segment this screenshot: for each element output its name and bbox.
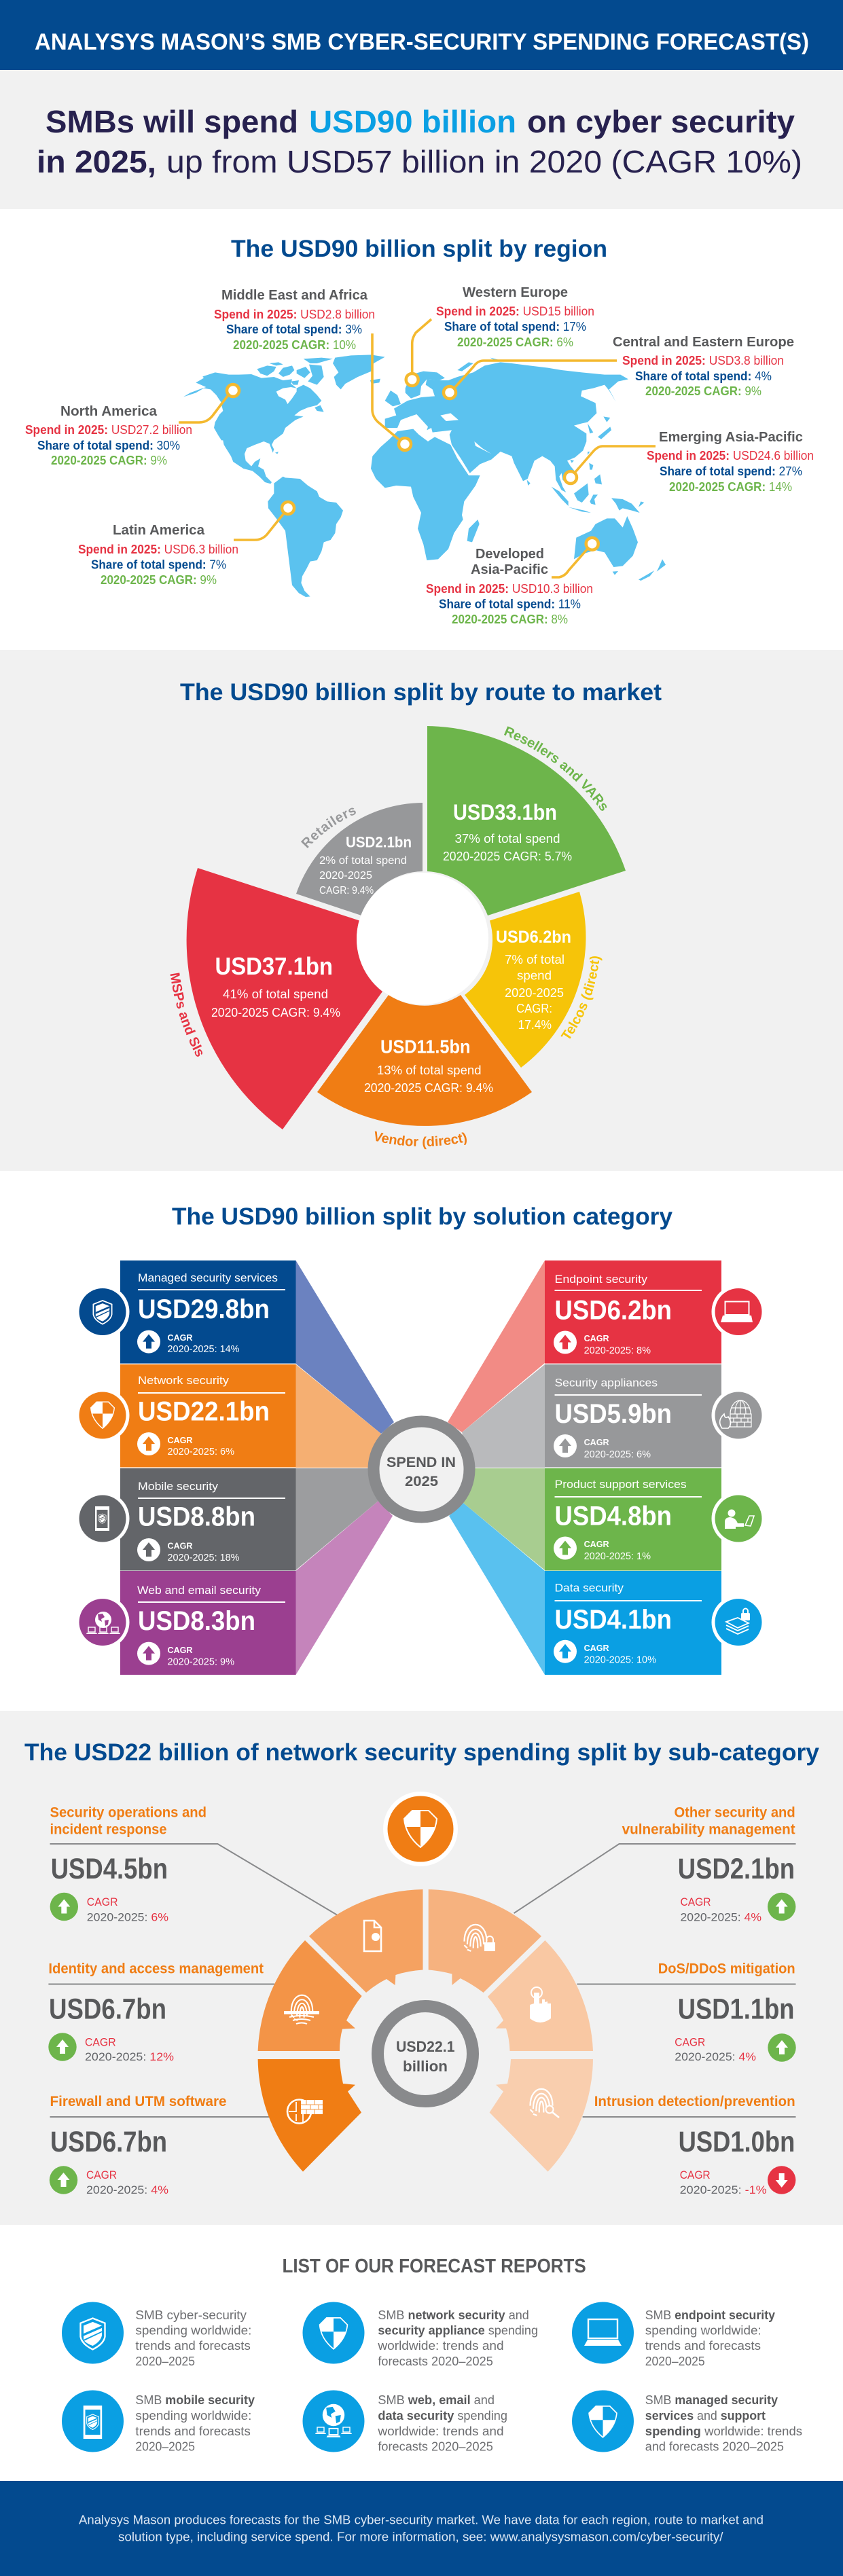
curved labels: Resellers and VARs [504, 726, 607, 811]
report: managed security and support: and forecasts 2020–2025 [645, 2440, 784, 2454]
callout: Developed Asia-Pacific: Developed [476, 547, 544, 562]
headline line 1: SMBs will spend [46, 104, 298, 139]
callout: Developed Asia-Pacific: Share of total spend: 11% [439, 598, 581, 611]
item: firewall and UTM software: 2020-2025: 4% [86, 2183, 168, 2196]
category: mobile security: Mobile security [138, 1480, 219, 1493]
report: cyber-security spending [62, 2302, 251, 2368]
category: endpoint security [545, 1260, 765, 1364]
section title: solution category: The USD90 billion split by solution category [172, 1203, 673, 1230]
category: mobile security: CAGR [167, 1540, 193, 1551]
headline line 2: up from USD57 billion in 2020 (CAGR 10%) [166, 144, 802, 179]
curved labels: MSPs and SIs [170, 973, 202, 1057]
item: other security and vulnerability management [622, 1805, 795, 1923]
report: cyber-security spending: SMB cyber-security [135, 2308, 247, 2322]
banner title: ANALYSYS MASON’S SMB CYBER-SECURITY SPENDING FORECAST(S) [35, 29, 809, 55]
category: data security: USD4.1bn [554, 1605, 672, 1635]
section title: sub-category: The USD22 billion of network security spending split by sub-category [24, 1739, 820, 1766]
wedge: telcos: spend [517, 968, 552, 982]
headline line 1 [46, 104, 795, 139]
report: endpoint security: trends and forecasts [645, 2339, 761, 2353]
wedge: vendor direct: 2020-2025 CAGR: 9.4% [364, 1081, 493, 1095]
callout: North America [25, 384, 239, 467]
callout: Latin America: Latin America [113, 523, 205, 538]
funnel wedges linking categories to centre [296, 1260, 545, 1675]
callout: Emerging Asia-Pacific: 2020-2025 CAGR: 14% [669, 480, 792, 494]
category: product support services: CAGR [584, 1539, 609, 1549]
panel: route to market [0, 650, 843, 1171]
report: network security and appliances: worldwide: trends and [377, 2339, 504, 2353]
callout: Emerging Asia-Pacific: Emerging Asia-Pacific [659, 430, 803, 445]
wedge: resellers and VARs: 37% of total spend [455, 832, 560, 846]
callout: North America: 2020-2025 CAGR: 9% [51, 454, 167, 467]
callout: Central and Eastern Europe: Spend in 2025: USD3.8 billion [622, 354, 784, 367]
segment: firewall and UTM [258, 2059, 361, 2172]
segment: identity and access [258, 1940, 362, 2051]
footer text: solution type, including service spend. For more information, see: www.analysysmason.com/cyber-security/ [118, 2530, 723, 2544]
callout: Middle East and Africa: Share of total spend: 3% [226, 323, 362, 336]
callout: Latin America: 2020-2025 CAGR: 9% [101, 573, 217, 587]
section title: route to market: The USD90 billion split by route to market [180, 679, 662, 706]
centre ring: spend in 2025 [374, 1421, 469, 1517]
callout: Latin America [78, 502, 294, 587]
item: identity and access management [48, 1961, 264, 2063]
callout: Emerging Asia-Pacific: Share of total spend: 27% [660, 465, 802, 478]
centre ring: USD22.1 billion [378, 2006, 473, 2101]
category: endpoint security: 2020-2025: 8% [584, 1345, 651, 1356]
wedge: telcos: 17.4% [518, 1018, 552, 1032]
report: managed security and support: SMB managed security [645, 2393, 778, 2407]
category: managed security services: USD29.8bn [138, 1294, 270, 1324]
wedge: MSPs and SIs [187, 868, 382, 1129]
callout: Western Europe: Western Europe [463, 285, 568, 300]
item: DoS/DDoS mitigation: USD1.1bn [678, 1993, 795, 2026]
callout: North America: Spend in 2025: USD27.2 billion [25, 423, 192, 437]
category: managed security services [76, 1260, 296, 1364]
category: endpoint security: Endpoint security [554, 1273, 648, 1286]
icon: network shield [383, 1792, 458, 1866]
wedge: retailers: 2% of total spend [319, 855, 407, 867]
callout: Developed Asia-Pacific: 2020-2025 CAGR: 8% [452, 613, 568, 626]
callout: Middle East and Africa: 2020-2025 CAGR: 10% [233, 338, 356, 352]
category: endpoint security: CAGR [584, 1333, 609, 1343]
report: mobile security: SMB mobile security [135, 2393, 255, 2407]
category: network security: USD22.1bn [138, 1396, 270, 1426]
item: other security and vulnerability management: USD2.1bn [678, 1853, 795, 1885]
category: data security: Data security [554, 1581, 624, 1595]
category: security appliances: 2020-2025: 6% [584, 1449, 651, 1460]
wedge: resellers and VARs: USD33.1bn [453, 800, 557, 824]
callout: Developed Asia-Pacific [426, 538, 598, 626]
wedge: retailers: 2020-2025 [319, 870, 372, 882]
report: managed security and support [572, 2391, 802, 2454]
footer text: Analysys Mason produces forecasts for the SMB cyber-security market. We have data for each region, route to market and [79, 2514, 764, 2527]
category: data security [545, 1571, 765, 1675]
report: cyber-security spending: trends and forecasts [135, 2339, 251, 2353]
callout: Latin America: Spend in 2025: USD6.3 billion [78, 543, 238, 556]
wedge: vendor direct: 13% of total spend [377, 1064, 481, 1077]
item: other security and vulnerability management: 2020-2025: 4% [681, 1910, 761, 1923]
item: firewall and UTM software: Firewall and UTM software [50, 2094, 227, 2109]
callout: Middle East and Africa: Spend in 2025: USD2.8 billion [214, 308, 375, 321]
callout: Middle East and Africa: Middle East and Africa [221, 288, 368, 303]
callout: Western Europe: 2020-2025 CAGR: 6% [457, 335, 573, 349]
item: DoS/DDoS mitigation: CAGR [675, 2036, 705, 2048]
wedge: telcos: 2020-2025 [505, 986, 564, 1000]
category: security appliances: CAGR [584, 1437, 609, 1447]
category: managed security services: Managed security services [138, 1271, 278, 1284]
centre ring: USD22.1 billion: USD22.1 [396, 2038, 455, 2055]
connector lines [48, 1844, 795, 2117]
wedge: retailers: USD2.1bn [346, 834, 412, 850]
callout: Latin America: Share of total spend: 7% [91, 558, 226, 572]
curved labels: Vendor (direct) [375, 1131, 467, 1149]
item: firewall and UTM software [50, 2094, 227, 2196]
segment: other security [429, 1889, 541, 1993]
callout: Emerging Asia-Pacific [564, 430, 814, 494]
world map [183, 355, 666, 597]
wedge: MSPs and SIs: 41% of total spend [223, 987, 328, 1001]
segment: DoS mitigation [488, 1940, 593, 2051]
callout: Central and Eastern Europe: Share of total spend: 4% [635, 369, 772, 383]
item: intrusion detection/prevention [594, 2094, 795, 2196]
wedge: vendor direct [317, 995, 532, 1126]
category: product support services: USD4.8bn [554, 1502, 672, 1531]
report: managed security and support: spending worldwide: trends [645, 2425, 802, 2438]
callout: Western Europe [406, 285, 594, 386]
item: security operations and incident response: USD4.5bn [51, 1853, 168, 1885]
report: mobile security: spending worldwide: [135, 2409, 251, 2423]
item: DoS/DDoS mitigation [658, 1961, 796, 2063]
wedge: telcos: USD6.2bn [496, 928, 571, 947]
headline line 1: USD90 billion [309, 104, 516, 139]
chart: route to market radial pie [170, 726, 626, 1149]
item: intrusion detection/prevention: Intrusion detection/prevention [594, 2094, 795, 2109]
item: DoS/DDoS mitigation: DoS/DDoS mitigation [658, 1961, 795, 1976]
category: web and email security: 2020-2025: 9% [167, 1657, 234, 1668]
wedge: telcos: CAGR: [516, 1002, 552, 1015]
report: web, email and data security: SMB web, email and [378, 2393, 495, 2407]
heading: list of reports: LIST OF OUR FORECAST REPORTS [283, 2255, 586, 2277]
callout: Developed Asia-Pacific: Spend in 2025: USD10.3 billion [426, 582, 593, 596]
curved labels: Telcos (direct) [560, 956, 602, 1039]
centre ring: spend in 2025: 2025 [405, 1474, 438, 1489]
curved labels: Retailers [301, 808, 356, 848]
wedge: resellers and VARs: 2020-2025 CAGR: 5.7% [443, 850, 572, 863]
report: endpoint security: spending worldwide: [645, 2324, 761, 2338]
category: data security: 2020-2025: 10% [584, 1655, 656, 1666]
callout: Developed Asia-Pacific: Asia-Pacific [471, 562, 548, 577]
centre ring: spend in 2025: SPEND IN [387, 1455, 456, 1470]
callout: Emerging Asia-Pacific: Spend in 2025: USD24.6 billion [647, 449, 814, 462]
item: security operations and incident response: Security operations and [50, 1805, 207, 1821]
centre hole [357, 873, 488, 1004]
category: network security: CAGR [167, 1435, 193, 1445]
category: web and email security: USD8.3bn [138, 1606, 255, 1636]
wedge: retailers: CAGR: 9.4% [319, 885, 374, 896]
wedge: MSPs and SIs: 2020-2025 CAGR: 9.4% [211, 1006, 340, 1019]
curved labels [170, 726, 607, 1149]
report: cyber-security spending: 2020–2025 [135, 2355, 195, 2368]
report: web, email and data security: forecasts 2020–2025 [378, 2440, 493, 2454]
item: identity and access management: USD6.7bn [49, 1993, 166, 2026]
report: web, email and data security [303, 2391, 507, 2454]
category: product support services [545, 1468, 765, 1570]
segmented ring chart [258, 1889, 593, 2172]
category: product support services: 2020-2025: 1% [584, 1551, 651, 1562]
category: mobile security [76, 1468, 296, 1570]
category: endpoint security: USD6.2bn [554, 1296, 672, 1326]
item: identity and access management: 2020-2025: 12% [85, 2050, 174, 2063]
item: other security and vulnerability management: CAGR [681, 1895, 711, 1908]
callout: Central and Eastern Europe: 2020-2025 CAGR: 9% [645, 384, 761, 398]
item: firewall and UTM software: USD6.7bn [50, 2126, 167, 2158]
wedge: resellers and VARs [427, 726, 626, 915]
headline line 2: in 2025, [37, 144, 156, 179]
category: network security [76, 1364, 296, 1467]
item: security operations and incident response: 2020-2025: 6% [87, 1910, 168, 1923]
report: endpoint security [572, 2302, 775, 2368]
item: intrusion detection/prevention: 2020-2025: -1% [680, 2183, 767, 2196]
header banner [0, 0, 843, 70]
wedge: telcos: 7% of total [505, 953, 564, 966]
report: network security and appliances: forecasts 2020–2025 [378, 2355, 493, 2368]
report: network security and appliances: SMB network security and [378, 2308, 529, 2322]
item: other security and vulnerability management: vulnerability management [622, 1821, 795, 1838]
headline line 1: on cyber security [527, 104, 795, 139]
callout: North America: Share of total spend: 30% [37, 439, 180, 452]
footer text [79, 2514, 764, 2544]
category: mobile security: 2020-2025: 18% [167, 1553, 240, 1563]
category: managed security services: CAGR [167, 1332, 193, 1343]
callout: Middle East and Africa [214, 288, 411, 450]
category: product support services: Product support services [554, 1478, 687, 1491]
category: network security: 2020-2025: 6% [167, 1447, 234, 1457]
item: intrusion detection/prevention: USD1.0bn [679, 2126, 795, 2158]
category: web and email security [76, 1571, 296, 1675]
section title: region: The USD90 billion split by region [231, 236, 607, 262]
report: managed security and support: services and support [645, 2409, 766, 2423]
report: mobile security [62, 2391, 255, 2454]
category: security appliances [545, 1364, 765, 1467]
centre ring: USD22.1 billion: billion [403, 2058, 448, 2075]
category: security appliances: Security appliances [554, 1376, 658, 1390]
report: network security and appliances: security appliance spending [378, 2324, 538, 2338]
segment: security operations [309, 1889, 423, 1993]
wedge: MSPs and SIs: USD37.1bn [215, 952, 333, 980]
report: web, email and data security: worldwide: trends and [377, 2425, 504, 2438]
category: data security: CAGR [584, 1643, 609, 1653]
report: endpoint security: 2020–2025 [645, 2355, 705, 2368]
wedge: telcos [465, 892, 586, 1068]
wedge: retailers [296, 803, 423, 915]
report: network security and appliances [303, 2302, 538, 2368]
category: web and email security: Web and email security [137, 1584, 262, 1597]
item: intrusion detection/prevention: CAGR [680, 2169, 711, 2181]
item: security operations and incident response: incident response [50, 1821, 167, 1838]
callout: Central and Eastern Europe: Central and Eastern Europe [613, 335, 794, 350]
report: mobile security: 2020–2025 [135, 2440, 195, 2454]
report: mobile security: trends and forecasts [135, 2425, 251, 2438]
category: managed security services: 2020-2025: 14% [167, 1344, 240, 1355]
item: security operations and incident response: CAGR [87, 1895, 118, 1908]
callout: North America: North America [60, 404, 158, 419]
segment: intrusion detection [490, 2059, 593, 2172]
headline panel [0, 70, 843, 209]
report: cyber-security spending: spending worldwide: [135, 2324, 251, 2338]
item: identity and access management: Identity and access management [48, 1961, 264, 1976]
wedge: vendor direct: USD11.5bn [380, 1036, 470, 1057]
report: web, email and data security: data security spending [378, 2409, 507, 2423]
item: DoS/DDoS mitigation: 2020-2025: 4% [675, 2050, 756, 2063]
callout: Western Europe: Share of total spend: 17% [444, 320, 586, 333]
item: identity and access management: CAGR [85, 2036, 116, 2048]
item: security operations and incident response [50, 1805, 207, 1923]
callout: Western Europe: Spend in 2025: USD15 billion [436, 304, 594, 318]
category: security appliances: USD5.9bn [554, 1399, 672, 1429]
category: mobile security: USD8.8bn [138, 1502, 255, 1532]
report: endpoint security: SMB endpoint security [645, 2308, 775, 2322]
category: network security: Network security [138, 1374, 230, 1387]
footer banner [0, 2481, 843, 2576]
callout: Central and Eastern Europe [444, 335, 794, 399]
item: firewall and UTM software: CAGR [86, 2169, 117, 2181]
item: other security and vulnerability management: Other security and [674, 1805, 795, 1821]
panel: network security sub-categories [0, 1711, 843, 2225]
category: web and email security: CAGR [167, 1645, 193, 1655]
